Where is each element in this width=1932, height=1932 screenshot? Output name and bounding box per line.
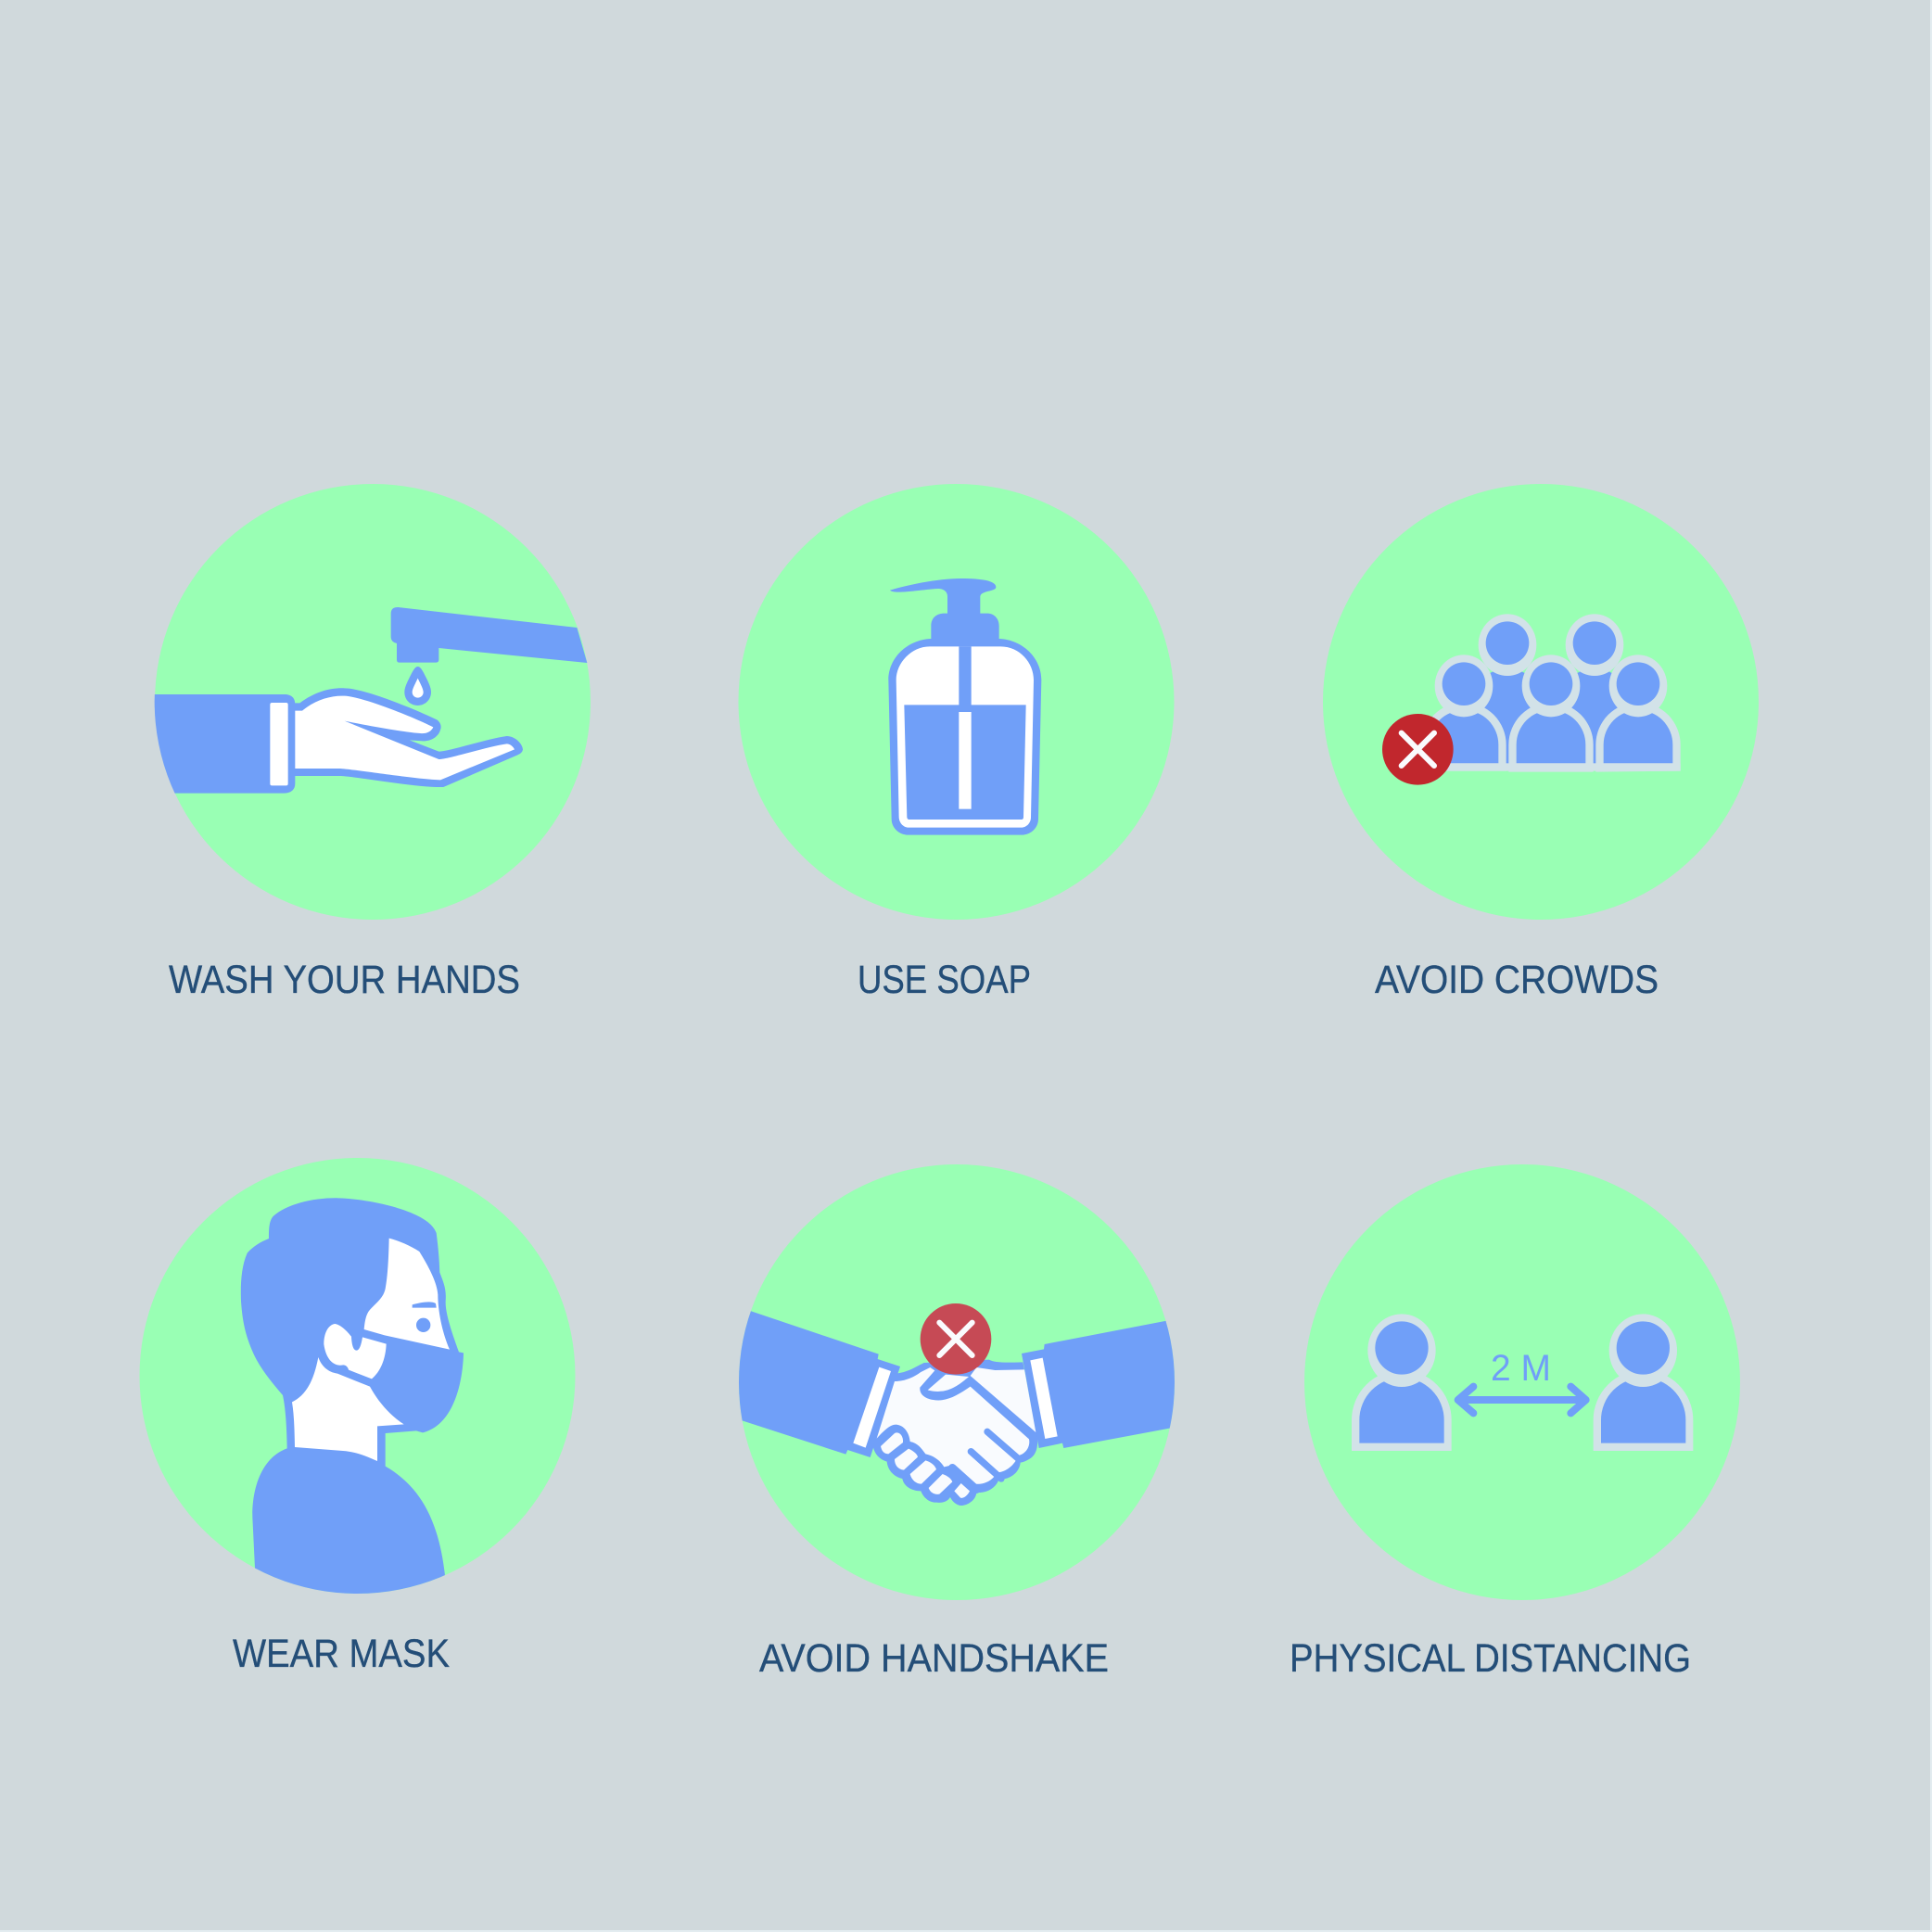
label: wear mask: WEAR MASK <box>233 1632 450 1676</box>
panel: use soap <box>738 484 1174 920</box>
circle background: avoid crowds <box>1323 484 1759 920</box>
circle background: avoid handshake <box>739 1164 1175 1600</box>
label: physical distancing: PHYSICAL DISTANCING <box>1290 1636 1691 1681</box>
panel: physical distancing <box>1304 1164 1740 1600</box>
icon: handshake <box>739 1303 1175 1506</box>
circle background: wear mask <box>139 1158 575 1594</box>
circle background: physical distancing <box>1304 1164 1740 1600</box>
icon: two people two metres apart <box>1352 1314 1693 1451</box>
label: avoid handshake: AVOID HANDSHAKE <box>759 1636 1109 1681</box>
label: wash your hands: WASH YOUR HANDS <box>169 958 520 1002</box>
panel: avoid handshake <box>739 1164 1175 1600</box>
panel: avoid crowds <box>1323 484 1759 920</box>
icon: soap dispenser <box>888 578 1041 835</box>
panel: wear mask <box>139 1158 575 1610</box>
icon: water drop <box>404 667 431 705</box>
label: avoid crowds: AVOID CROWDS <box>1375 958 1659 1002</box>
panel: wash your hands <box>139 484 591 920</box>
icon: red cross badge <box>1382 714 1454 785</box>
icon: red cross badge <box>921 1303 991 1375</box>
icon: open hand <box>294 688 523 787</box>
icon: crowd of people <box>1382 614 1681 785</box>
label: use soap: USE SOAP <box>858 958 1031 1002</box>
distance label: 2 M <box>1491 1348 1551 1389</box>
circle background: use soap <box>738 484 1174 920</box>
icon: sleeve and cuff <box>139 694 295 794</box>
icon: faucet <box>391 607 587 663</box>
arrow: double headed distance arrow <box>1458 1387 1586 1413</box>
circle background: wash your hands <box>155 484 591 920</box>
icon: man wearing mask <box>241 1198 464 1610</box>
icon: hand under faucet <box>139 607 587 794</box>
